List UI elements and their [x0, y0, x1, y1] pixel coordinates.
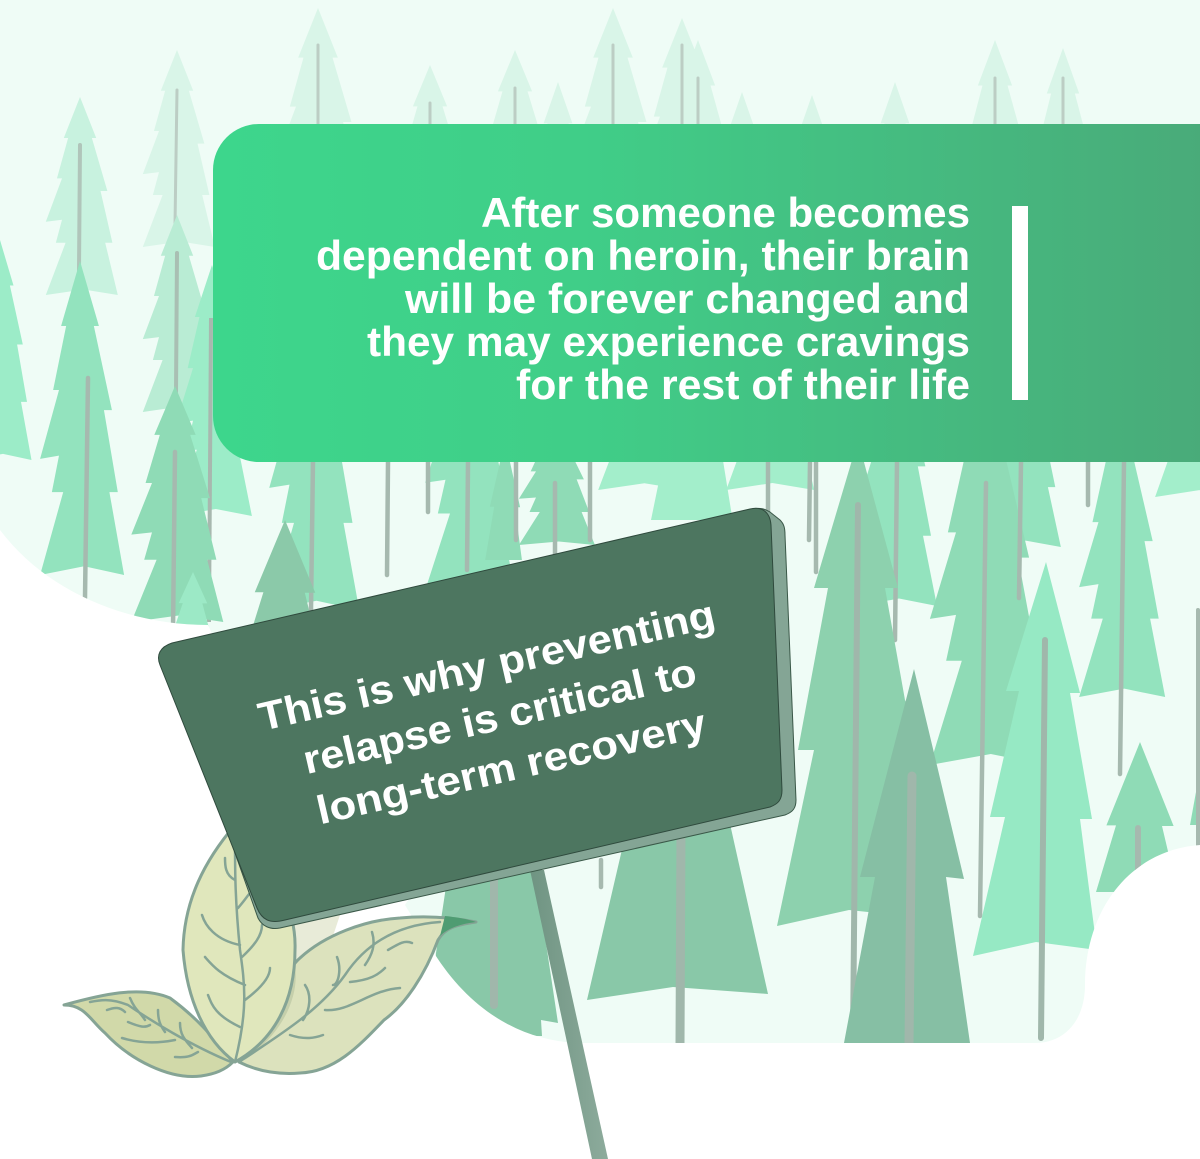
small tree at right edge [1190, 792, 1196, 825]
sign [158, 508, 796, 929]
left leaf veins [90, 998, 231, 1062]
mid darker trees [131, 370, 1178, 892]
right leaf [239, 917, 476, 1073]
tall tree right of sign [777, 462, 906, 926]
signpost pole [530, 870, 608, 1159]
leaves cluster [64, 825, 476, 1077]
lower trunks [494, 830, 681, 1043]
centre leaf [183, 825, 295, 1062]
banner text: they may experience cravings [367, 318, 970, 365]
sign text: long-term recovery [312, 701, 711, 833]
dark small tree behind sign [254, 520, 315, 624]
banner text [316, 189, 970, 408]
back row of pale trees [143, 8, 1083, 247]
mid row trees [40, 261, 1165, 697]
right leaf tip tint [440, 916, 476, 936]
back row trunks [175, 45, 1063, 225]
sign edge [165, 508, 796, 929]
sign face [158, 508, 782, 922]
dark front tree [844, 669, 970, 1043]
sign text: relapse is critical to [299, 650, 701, 783]
sign text: This is why preventing [254, 593, 719, 740]
centre leaf veins [202, 840, 270, 1062]
tall tree trunk [853, 505, 858, 1040]
right leaf veins [239, 922, 440, 1062]
dark front tree trunk [909, 776, 912, 1043]
banner text: for the rest of their life [516, 361, 970, 408]
dark centre tree [587, 828, 768, 1000]
shadow cast by centre leaf [245, 965, 296, 1060]
small bright tree [174, 572, 209, 628]
row behind banner [598, 240, 1200, 520]
banner text: After someone becomes [481, 189, 970, 236]
back pale leaf [293, 915, 340, 960]
bright front tree trunk [1041, 640, 1045, 1038]
second row trees [0, 97, 252, 622]
bright front tree [973, 562, 1097, 956]
banner: heroin dependence statement [213, 124, 1200, 462]
banner accent bar [1012, 206, 1028, 400]
sign text [254, 593, 742, 841]
mid row trunks [85, 378, 1198, 916]
banner text: dependent on heroin, their brain [316, 232, 970, 279]
left leaf [64, 992, 233, 1077]
dark lower left tree [430, 870, 558, 1036]
banner text: will be forever changed and [404, 275, 970, 322]
